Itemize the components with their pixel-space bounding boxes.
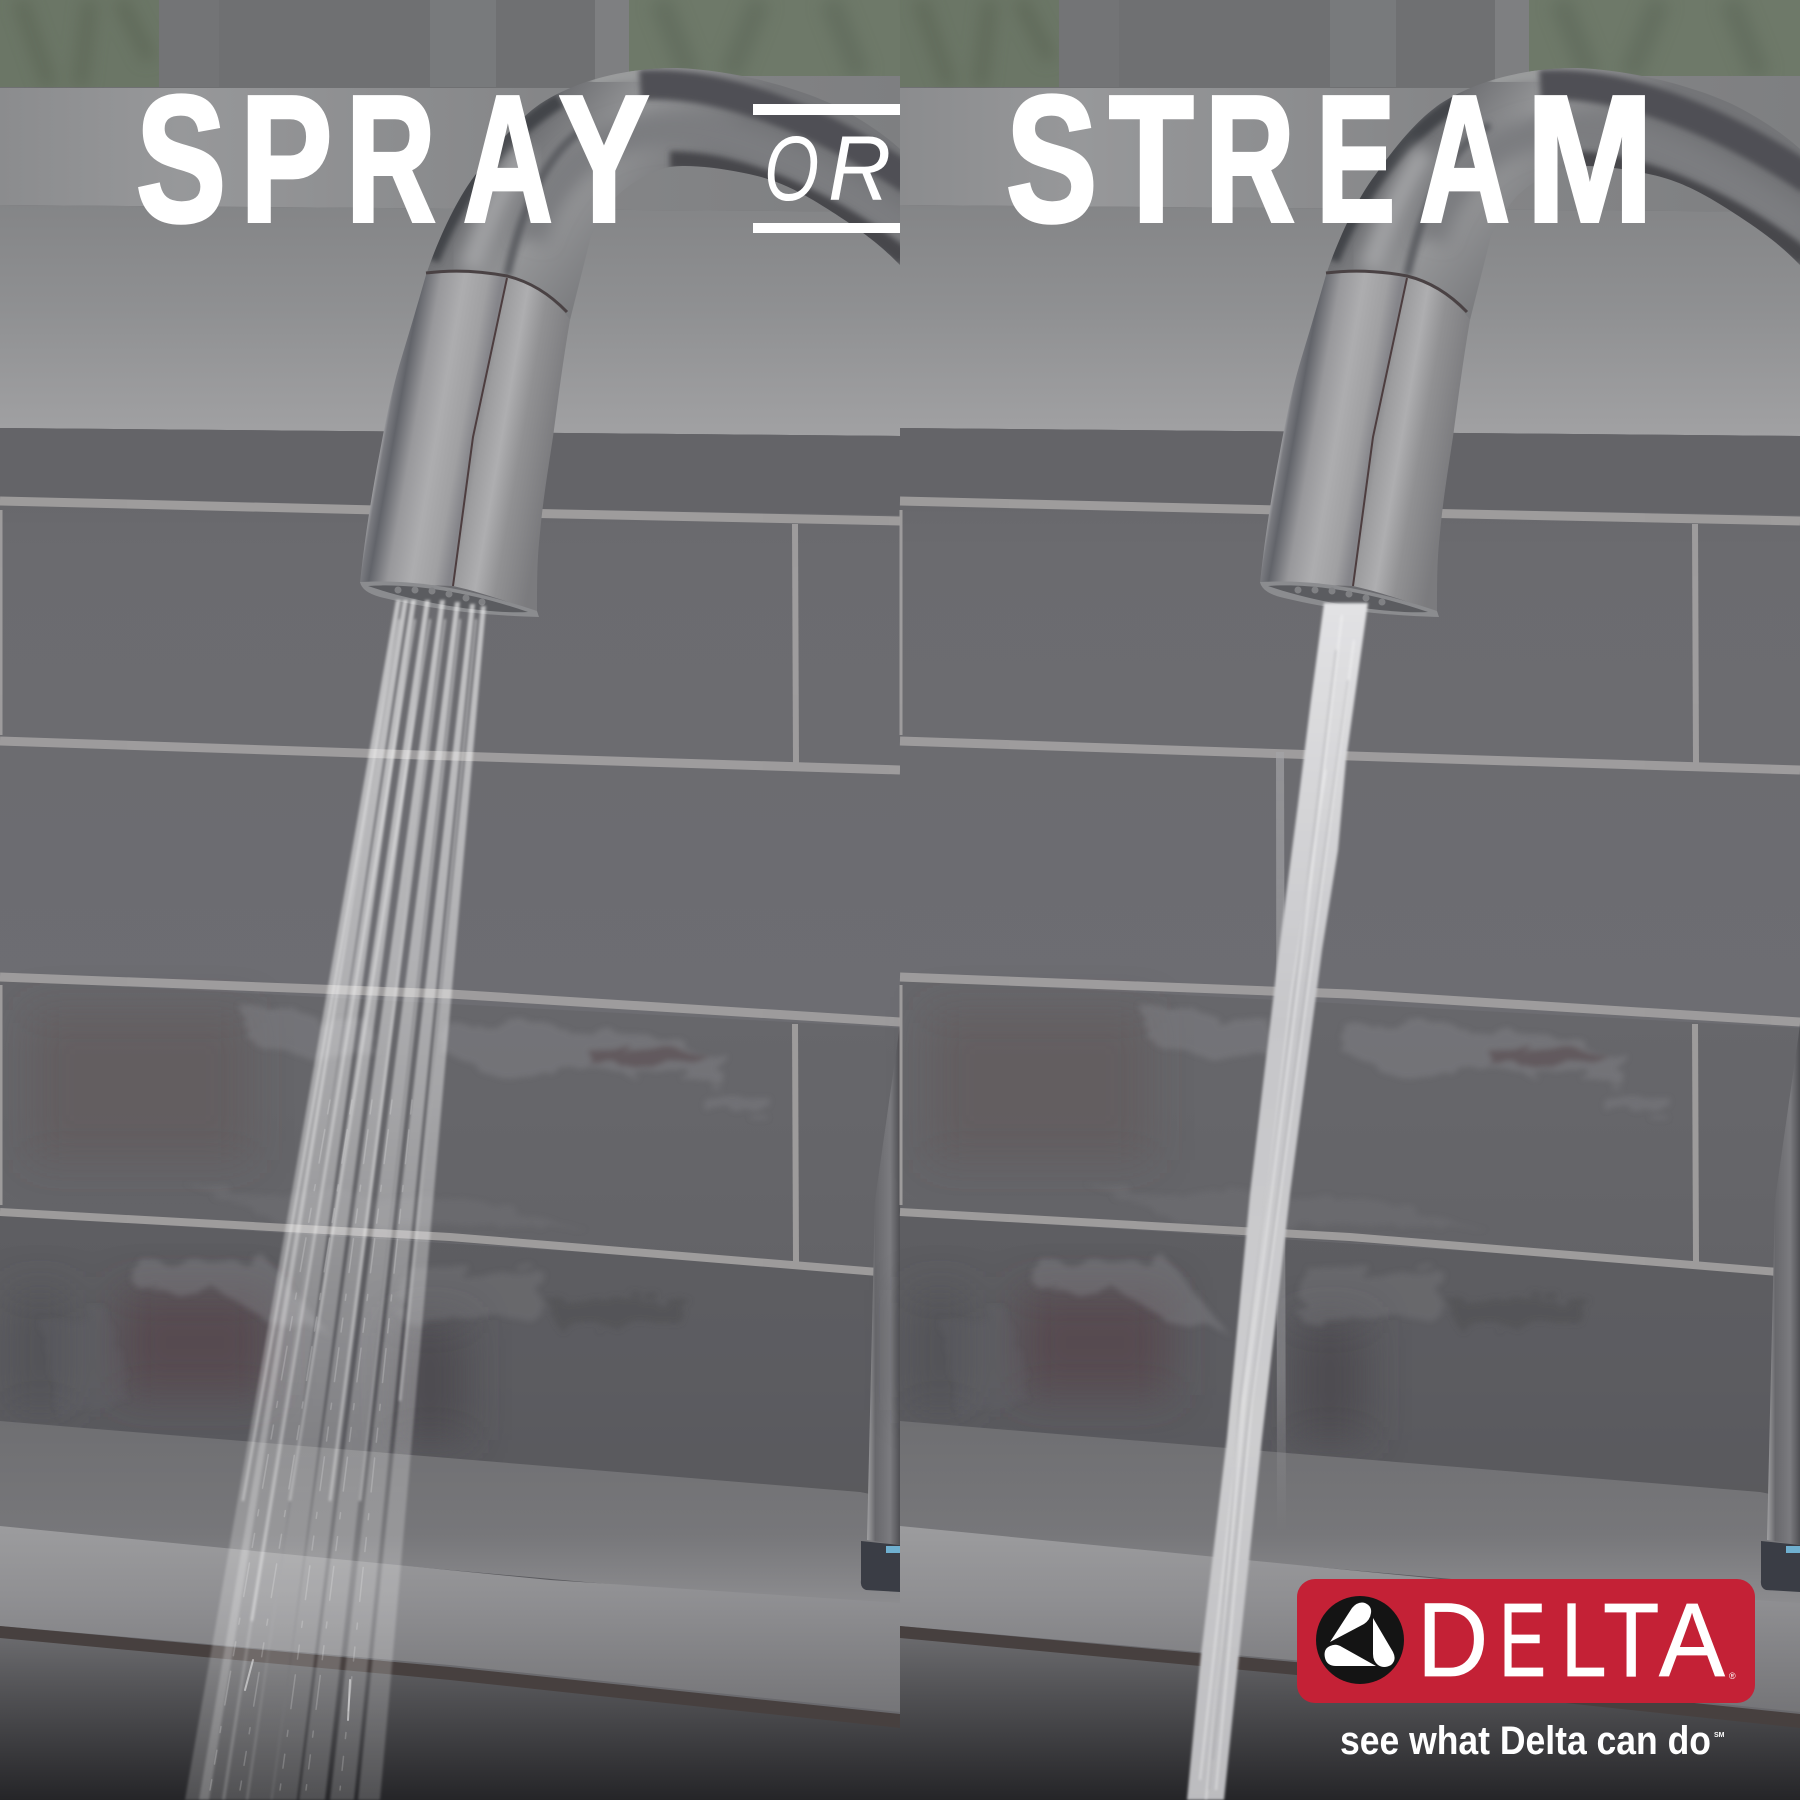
headline: SPRAY bbox=[136, 59, 650, 260]
infographic canvas: L bbox=[1561, 1582, 1607, 1699]
infographic canvas: R bbox=[1205, 59, 1295, 260]
spray water streams bbox=[185, 600, 486, 1800]
tagline: see what Delta can do bbox=[1340, 1719, 1711, 1763]
infographic canvas: T bbox=[1603, 1582, 1659, 1699]
divider word: OR bbox=[764, 118, 891, 220]
infographic canvas: P bbox=[240, 59, 333, 260]
infographic canvas: E bbox=[1499, 1582, 1546, 1699]
wordmark: DELTA bbox=[1417, 1582, 1726, 1699]
infographic canvas: D bbox=[1417, 1582, 1488, 1699]
divider rule: top of OR bbox=[753, 104, 900, 115]
infographic canvas: M bbox=[1526, 59, 1653, 260]
panel: spray side photo bbox=[0, 0, 910, 1800]
icon: black circle with tri-drop emblem bbox=[1316, 1596, 1404, 1684]
infographic canvas: Y bbox=[558, 59, 649, 260]
panel: stream side photo bbox=[900, 0, 1800, 1800]
divider rule: bottom of OR bbox=[753, 223, 900, 233]
infographic canvas: R bbox=[346, 59, 436, 260]
infographic canvas: A bbox=[463, 59, 553, 260]
infographic canvas: R bbox=[828, 118, 891, 220]
faint water reflection on tile bbox=[1276, 752, 1286, 1530]
stream water column bbox=[1187, 603, 1368, 1800]
infographic canvas: O bbox=[764, 118, 819, 220]
brand logo: Delta badge background bbox=[1297, 1579, 1755, 1703]
infographic canvas: T bbox=[1109, 59, 1193, 260]
tagline: SM bbox=[1714, 1732, 1725, 1739]
infographic canvas: A bbox=[1419, 59, 1510, 260]
infographic canvas: A bbox=[1659, 1582, 1725, 1699]
headline: STREAM bbox=[1006, 59, 1653, 260]
infographic canvas: S bbox=[136, 59, 226, 260]
infographic canvas: E bbox=[1316, 59, 1395, 260]
registered mark: ® bbox=[1729, 1671, 1736, 1681]
infographic canvas: S bbox=[1006, 59, 1097, 260]
